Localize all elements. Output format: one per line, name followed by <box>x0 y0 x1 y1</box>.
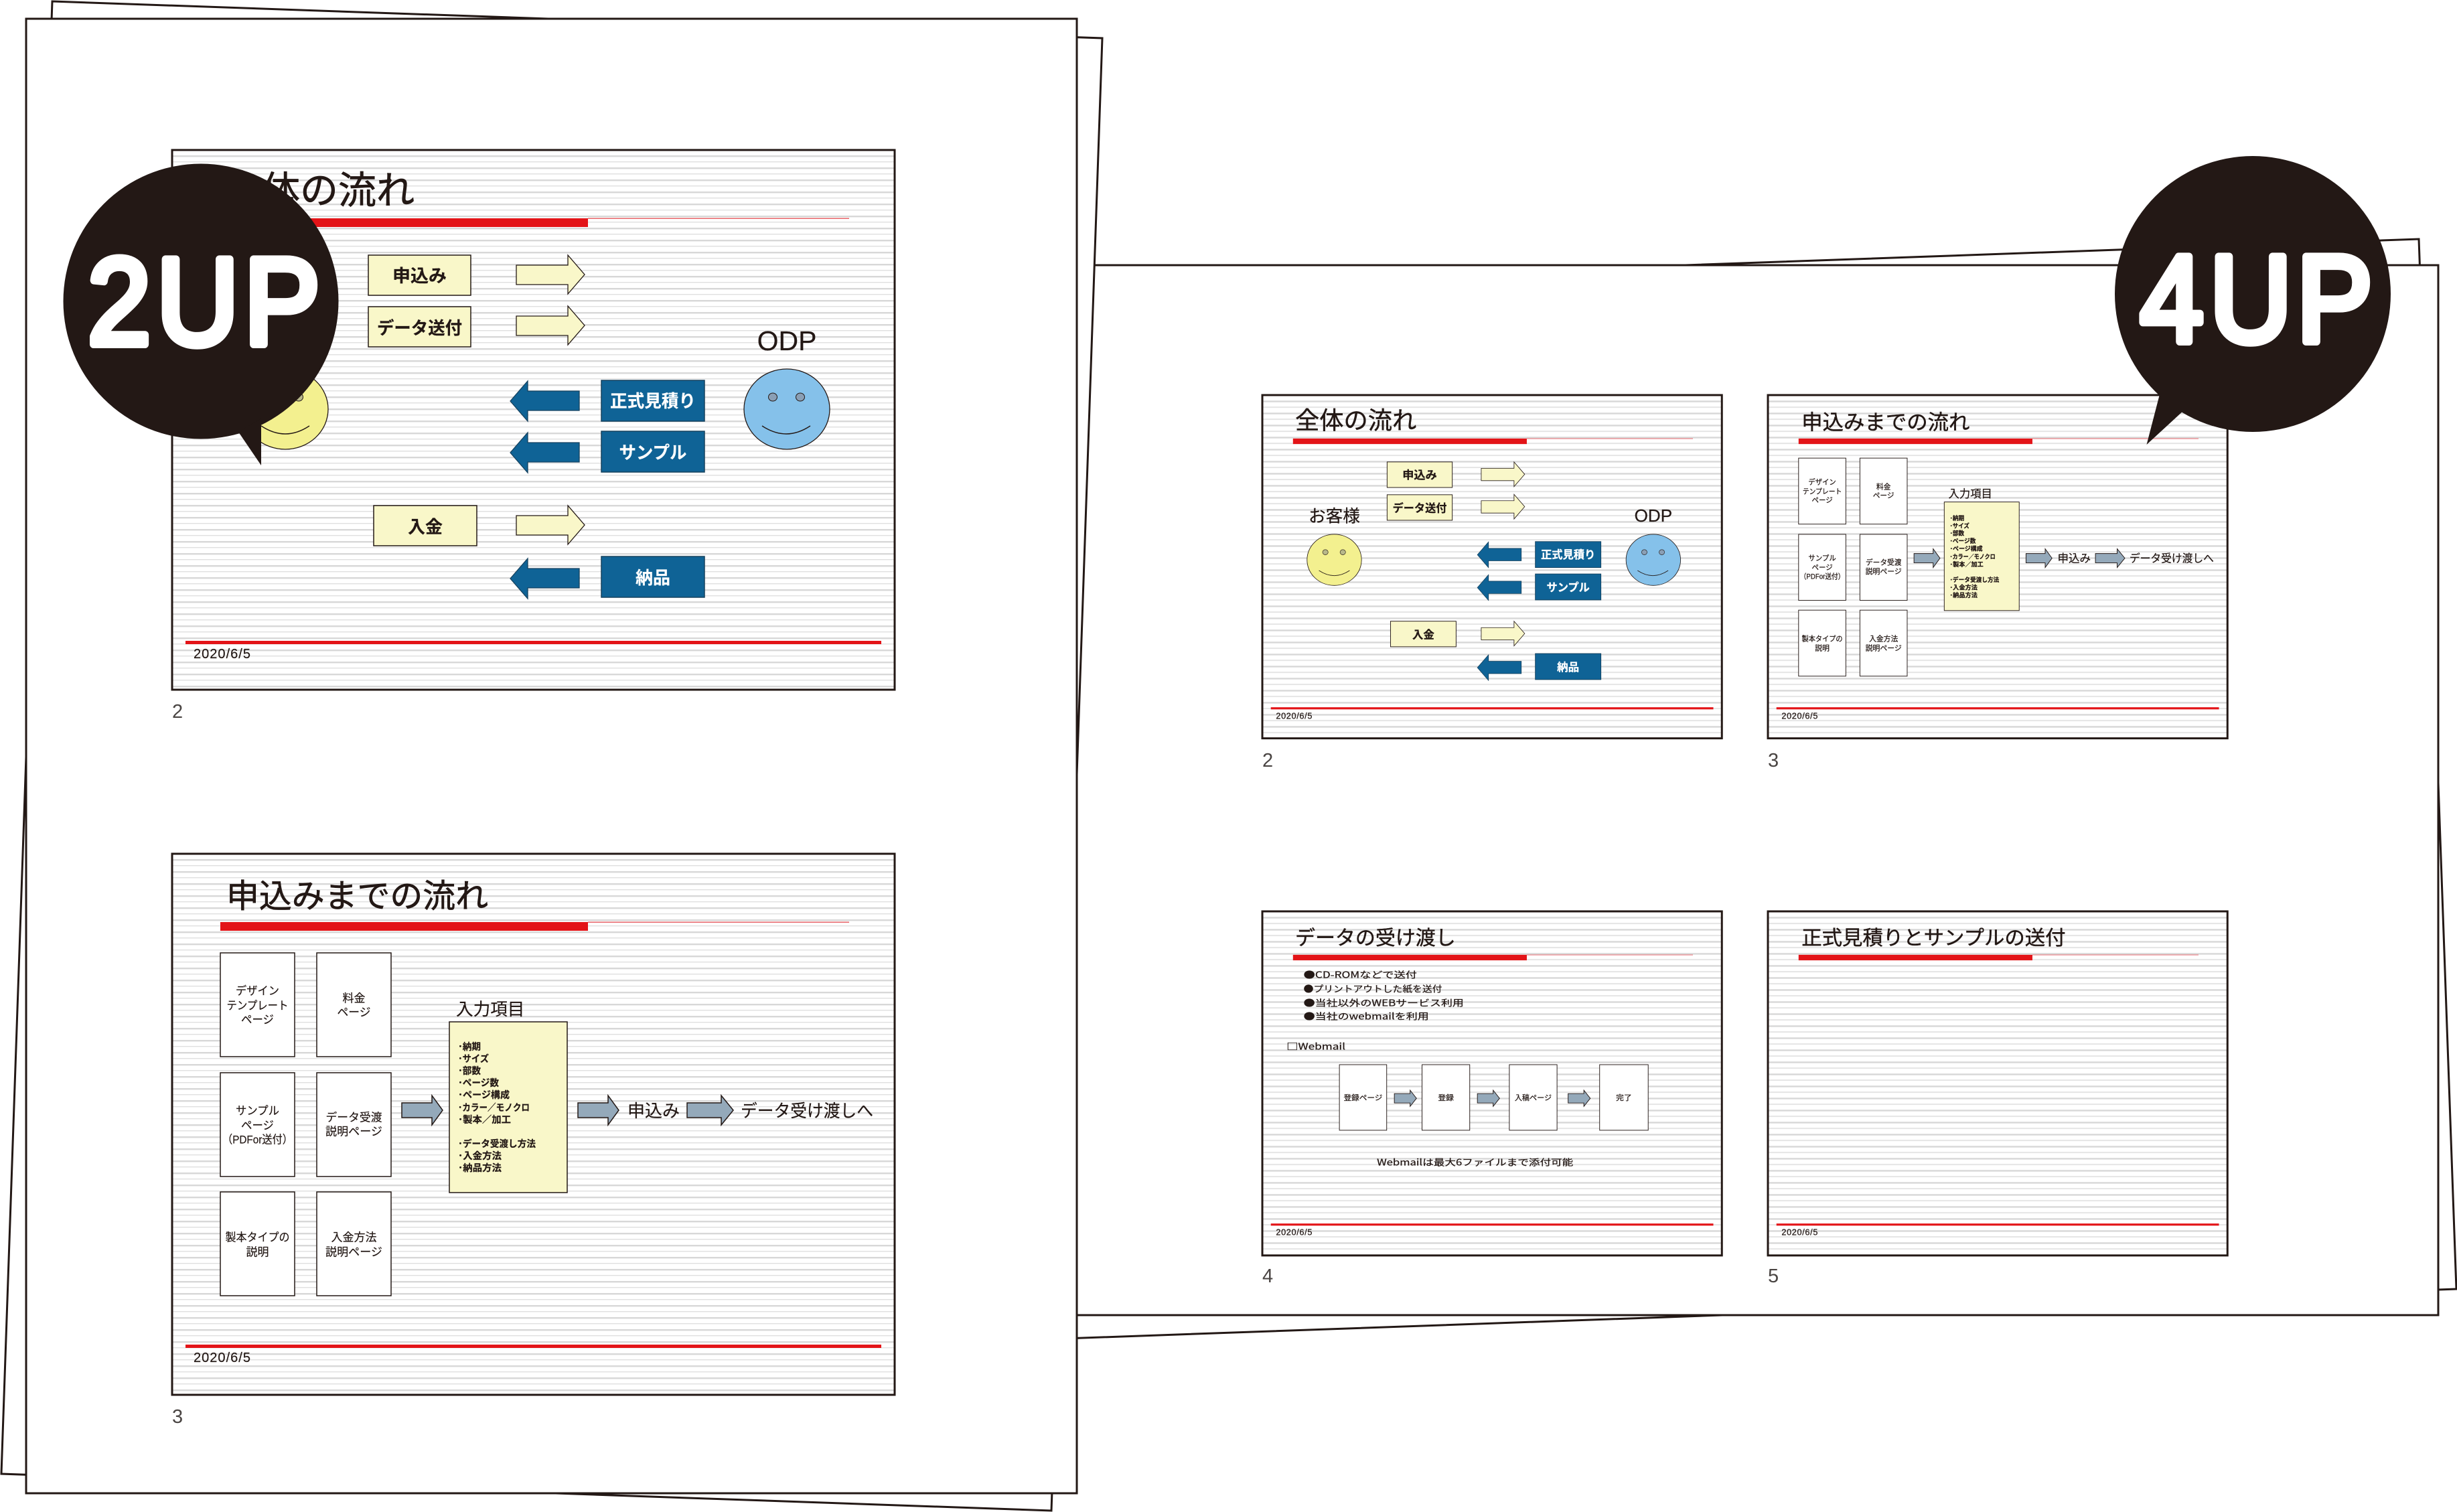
page number 3 (4UP): 3 <box>1768 750 1779 771</box>
box: 入金方法説明ページ: 入金方法 <box>1869 633 1898 643</box>
label: 申込み: 申込み <box>627 1101 680 1121</box>
label: データ受け渡しへ: データ受け渡しへ <box>741 1101 873 1121</box>
bullet list: ●プリントアウトした紙を送付 <box>1304 982 1442 995</box>
arrow: to 申込み <box>578 1095 619 1125</box>
box: 料金ページ: 料金 <box>343 992 366 1004</box>
title rule <box>1799 439 2199 444</box>
title rule <box>220 218 849 227</box>
box: 入稿ページ <box>1509 1065 1557 1130</box>
date: 2020/6/5 <box>1781 710 1817 721</box>
panel: input items list <box>449 1022 567 1193</box>
box: 正式見積り: 正式見積り <box>610 391 696 411</box>
icon: customer face <box>1307 534 1361 585</box>
box: サンプル: サンプル <box>619 443 687 463</box>
box: デザインテンプレートページ: テンプレート <box>226 999 288 1012</box>
box: データ受渡説明ページ: 説明ページ <box>325 1125 382 1138</box>
panel: input items list: ･ページ構成 <box>458 1089 510 1101</box>
box: 製本タイプの説明 <box>220 1192 295 1296</box>
box: 料金ページ: ページ <box>338 1006 371 1019</box>
footer rule <box>185 1345 881 1348</box>
box: 登録: 登録 <box>1438 1093 1454 1102</box>
date: 2020/6/5 <box>1276 710 1312 721</box>
label: 申込み: 申込み <box>2057 552 2091 565</box>
box: 申込み <box>1387 462 1453 487</box>
label: ODP: ODP <box>1635 506 1672 526</box>
heading: 入力項目: 入力項目 <box>1949 488 1992 500</box>
title: 全体の流れ <box>1295 407 1416 435</box>
box: 納品: 納品 <box>636 568 670 588</box>
title: 申込みまでの流れ <box>226 879 488 915</box>
footer rule <box>1777 707 2219 709</box>
box: デザインテンプレートページ: ページ <box>1812 497 1833 505</box>
box: 正式見積り: 正式見積り <box>1541 548 1595 561</box>
badge: 4UP speech bubble: 4UP <box>2140 231 2373 368</box>
box: データ受渡説明ページ: データ受渡 <box>1866 558 1902 567</box>
badge: 4UP speech bubble <box>2115 156 2391 445</box>
title: データの受け渡し <box>1295 927 1456 950</box>
box: 製本タイプの説明: 説明 <box>1815 643 1830 652</box>
box: 納品 <box>601 556 704 597</box>
box: 料金ページ <box>1860 458 1907 524</box>
sheet: 2UP front page <box>26 19 1077 1493</box>
bullet list: ●CD-ROMなどで送付 <box>1304 968 1417 981</box>
box: 登録ページ <box>1339 1065 1387 1130</box>
arrow: left 3 <box>510 558 579 599</box>
box: 納品: 納品 <box>1557 661 1579 674</box>
icon: ODP face <box>1626 534 1681 585</box>
footer rule <box>185 641 881 644</box>
panel: input items list: ･データ受渡し方法 <box>1950 576 1999 583</box>
panel: input items list: ･サイズ <box>458 1053 489 1065</box>
box: 入金方法説明ページ <box>317 1192 391 1296</box>
page number 2 (4UP): 2 <box>1262 750 1273 771</box>
box: 申込み <box>368 255 471 295</box>
box: デザインテンプレートページ: ページ <box>241 1014 274 1026</box>
badge: 2UP speech bubble: 2UP <box>88 234 320 371</box>
arrow: left 2 <box>1477 575 1521 601</box>
box: サンプルページ <box>220 1073 295 1177</box>
page number 2: 2 <box>172 701 183 723</box>
box: 料金ページ: ページ <box>1873 492 1894 500</box>
arrow: right 2 <box>1481 494 1525 519</box>
box: サンプルページ: （PDFor送付） <box>222 1133 293 1146</box>
box: 入金方法説明ページ: 入金方法 <box>331 1231 376 1244</box>
arrow: right 3 <box>1481 621 1525 646</box>
label: Webmail: □Webmail <box>1286 1039 1345 1052</box>
arrow: left 3 <box>1477 655 1521 680</box>
box: サンプル <box>601 431 704 472</box>
panel: input items list: ･入金方法 <box>1950 583 1978 591</box>
box: 製本タイプの説明: 製本タイプの <box>1802 633 1843 643</box>
box: 入金方法説明ページ: 説明ページ <box>325 1245 382 1259</box>
panel: input items list: ･カラー／モノクロ <box>458 1102 530 1114</box>
slide: 2UP 全体の流れ <box>172 150 895 690</box>
panel: input items list: ･部数 <box>458 1065 481 1077</box>
footer rule <box>1271 707 1714 709</box>
title rule <box>1799 955 2199 960</box>
bullet list: ●当社のwebmailを利用 <box>1304 1009 1429 1022</box>
box: 登録 <box>1422 1065 1470 1130</box>
arrow: left 1 <box>510 381 579 421</box>
arrow: step 1 <box>1394 1090 1416 1106</box>
arrow: to input items <box>1914 549 1940 568</box>
arrow: right 2 <box>516 306 585 345</box>
box: 申込み: 申込み <box>1402 468 1437 481</box>
box: 入稿ページ: 入稿ページ <box>1515 1093 1552 1102</box>
box: データ送付 <box>368 307 471 347</box>
arrow: left 2 <box>510 433 579 473</box>
arrow: right 1 <box>1481 462 1525 487</box>
slide: 4UP 申込みまでの流れ <box>1768 395 2227 739</box>
box: 完了 <box>1600 1065 1648 1130</box>
panel: input items list <box>1944 502 2019 611</box>
page number 5: 5 <box>1768 1266 1779 1287</box>
footer rule <box>1777 1223 2219 1225</box>
box: 料金ページ <box>317 953 391 1057</box>
panel: input items list: ･サイズ <box>1950 522 1969 529</box>
arrow: step 3 <box>1568 1090 1590 1106</box>
box: デザインテンプレートページ: テンプレート <box>1803 487 1842 496</box>
box: デザインテンプレートページ <box>220 953 295 1057</box>
badge: 2UP speech bubble <box>63 163 339 465</box>
slide: 4UP 正式見積りとサンプルの送付 <box>1768 911 2227 1256</box>
panel: input items list: ･製本／加工 <box>1950 560 1984 568</box>
box: データ受渡説明ページ: データ受渡 <box>325 1110 382 1124</box>
label: お客様: お客様 <box>245 326 325 356</box>
box: データ受渡説明ページ <box>317 1073 391 1177</box>
title rule <box>1293 955 1693 960</box>
box: 登録ページ: 登録ページ <box>1343 1093 1383 1102</box>
box: サンプルページ: ページ <box>241 1120 274 1132</box>
note: Webmail limit: Webmailは最大6ファイルまで添付可能 <box>1377 1155 1573 1168</box>
box: サンプル: サンプル <box>1547 581 1590 594</box>
title: 全体の流れ <box>224 169 415 212</box>
box: 入金 <box>1390 621 1456 647</box>
box: 完了: 完了 <box>1616 1093 1632 1102</box>
box: デザインテンプレートページ: デザイン <box>236 984 279 998</box>
icon: customer face <box>242 369 328 449</box>
box: サンプルページ <box>1799 534 1846 601</box>
box: 申込み: 申込み <box>392 266 447 286</box>
sheet: 4UP front page <box>1031 265 2438 1315</box>
box: サンプルページ: サンプル <box>1808 554 1836 562</box>
panel: input items list: ･部数 <box>1950 530 1964 537</box>
box: サンプルページ: （PDFor送付） <box>1800 572 1844 581</box>
bullet list: ●当社以外のWEBサービス利用 <box>1304 996 1464 1009</box>
box: データ送付: データ送付 <box>1393 502 1446 515</box>
box: データ送付 <box>1387 495 1453 520</box>
date: 2020/6/5 <box>1276 1227 1312 1237</box>
panel: input items list: ･納品方法 <box>458 1162 502 1174</box>
footer rule <box>1271 1223 1714 1225</box>
panel: input items list: ･納品方法 <box>1950 591 1978 599</box>
panel: input items list: ･納期 <box>458 1041 481 1053</box>
heading: 入力項目: 入力項目 <box>456 1000 524 1019</box>
box: 入金方法説明ページ <box>1860 610 1907 676</box>
title rule <box>1293 439 1693 444</box>
sheet: 4UP back page <box>1027 239 2456 1339</box>
panel: input items list: ･ページ数 <box>1950 537 1976 544</box>
box: 入金 <box>374 506 477 546</box>
box: サンプルページ: サンプル <box>236 1105 279 1117</box>
sheet: 2UP back page <box>1 1 1102 1511</box>
panel: input items list: ･入金方法 <box>458 1150 502 1162</box>
arrow: to 申込み <box>2026 549 2052 568</box>
arrow: step 2 <box>1477 1090 1499 1106</box>
box: 製本タイプの説明: 説明 <box>246 1245 269 1259</box>
arrow: right 3 <box>516 506 585 544</box>
arrow: to データ受け渡し <box>2095 549 2125 568</box>
box: 製本タイプの説明 <box>1799 610 1846 676</box>
date: 2020/6/5 <box>1781 1227 1817 1237</box>
page number 4: 4 <box>1262 1266 1273 1287</box>
box: 納品 <box>1536 654 1601 680</box>
title: 申込みまでの流れ <box>1801 411 1969 435</box>
box: データ受渡説明ページ: 説明ページ <box>1866 566 1902 576</box>
arrow: right 1 <box>516 255 585 294</box>
icon: ODP face <box>744 369 830 449</box>
label: お客様: お客様 <box>1309 507 1360 526</box>
panel: input items list: ･納期 <box>1950 514 1964 522</box>
box: デザインテンプレートページ: デザイン <box>1808 477 1836 486</box>
box: 入金: 入金 <box>408 517 443 537</box>
box: データ受渡説明ページ <box>1860 534 1907 601</box>
box: 料金ページ: 料金 <box>1876 481 1891 491</box>
arrow: to データ受け渡し <box>687 1095 733 1125</box>
box: 入金: 入金 <box>1412 628 1434 641</box>
box: データ送付: データ送付 <box>377 318 462 338</box>
panel: input items list: ･ページ構成 <box>1950 545 1983 552</box>
panel: input items list: ･データ受渡し方法 <box>458 1138 536 1150</box>
date: 2020/6/5 <box>194 1351 250 1365</box>
panel: input items list: ･カラー／モノクロ <box>1950 554 1996 560</box>
box: 正式見積り <box>601 380 704 421</box>
arrow: left 1 <box>1477 542 1521 568</box>
box: 正式見積り <box>1536 542 1601 568</box>
box: 入金方法説明ページ: 説明ページ <box>1866 643 1902 652</box>
date: 2020/6/5 <box>194 647 250 662</box>
slide: 4UP データの受け渡し <box>1262 911 1722 1256</box>
panel: input items list: ･製本／加工 <box>458 1114 511 1126</box>
box: 製本タイプの説明: 製本タイプの <box>225 1231 289 1244</box>
bullet list <box>1304 968 1464 1022</box>
page number 3: 3 <box>172 1406 183 1428</box>
label: ODP: ODP <box>757 325 816 356</box>
box: サンプルページ: ページ <box>1812 564 1833 572</box>
panel: input items list: ･ページ数 <box>458 1077 500 1089</box>
title rule <box>220 921 849 931</box>
arrow: to input items <box>402 1095 443 1125</box>
slide: 2UP 申込みまでの流れ <box>172 854 895 1395</box>
label: データ受け渡しへ: データ受け渡しへ <box>2130 552 2214 565</box>
title: 正式見積りとサンプルの送付 <box>1801 927 2066 950</box>
box: サンプル <box>1536 574 1601 600</box>
box: デザインテンプレートページ <box>1799 458 1846 524</box>
slide: 4UP 全体の流れ <box>1262 395 1722 739</box>
